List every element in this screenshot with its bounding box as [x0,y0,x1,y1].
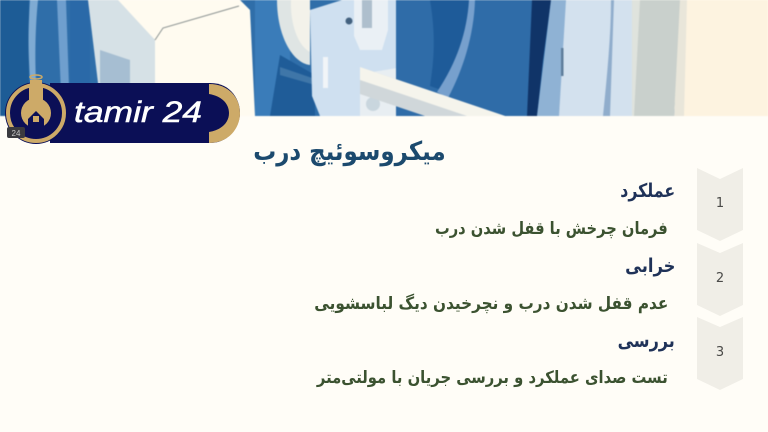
title: میکروسوئیچ درب [254,137,446,167]
description: function: فرمان چرخش با قفل شدن درب [435,219,668,239]
logo: tamir 24 badge [5,74,240,144]
heading: fault: خرابی [625,255,675,277]
step number 1: 1 [716,196,724,211]
switch body [310,0,397,116]
header illustration: washing machine door switch [0,0,768,117]
logo bar [50,83,240,143]
step number 3: 3 [716,345,724,360]
step number 2: 2 [716,271,724,286]
logo right gold bracket [209,84,240,143]
door blues [396,0,533,116]
logo wordmark: tamir 24 [74,96,202,129]
description: fault: عدم قفل شدن درب و نچرخیدن دیگ لباسشویی [314,294,668,314]
heading: inspection: بررسی [618,330,675,352]
white bar [360,67,505,116]
heading: function: عملکرد [620,180,675,202]
description: inspection: تست صدای عملکرد و بررسی جریان با مولتی‌متر [317,368,668,388]
logo round emblem: 24 [12,129,21,138]
logo round emblem [5,75,67,144]
